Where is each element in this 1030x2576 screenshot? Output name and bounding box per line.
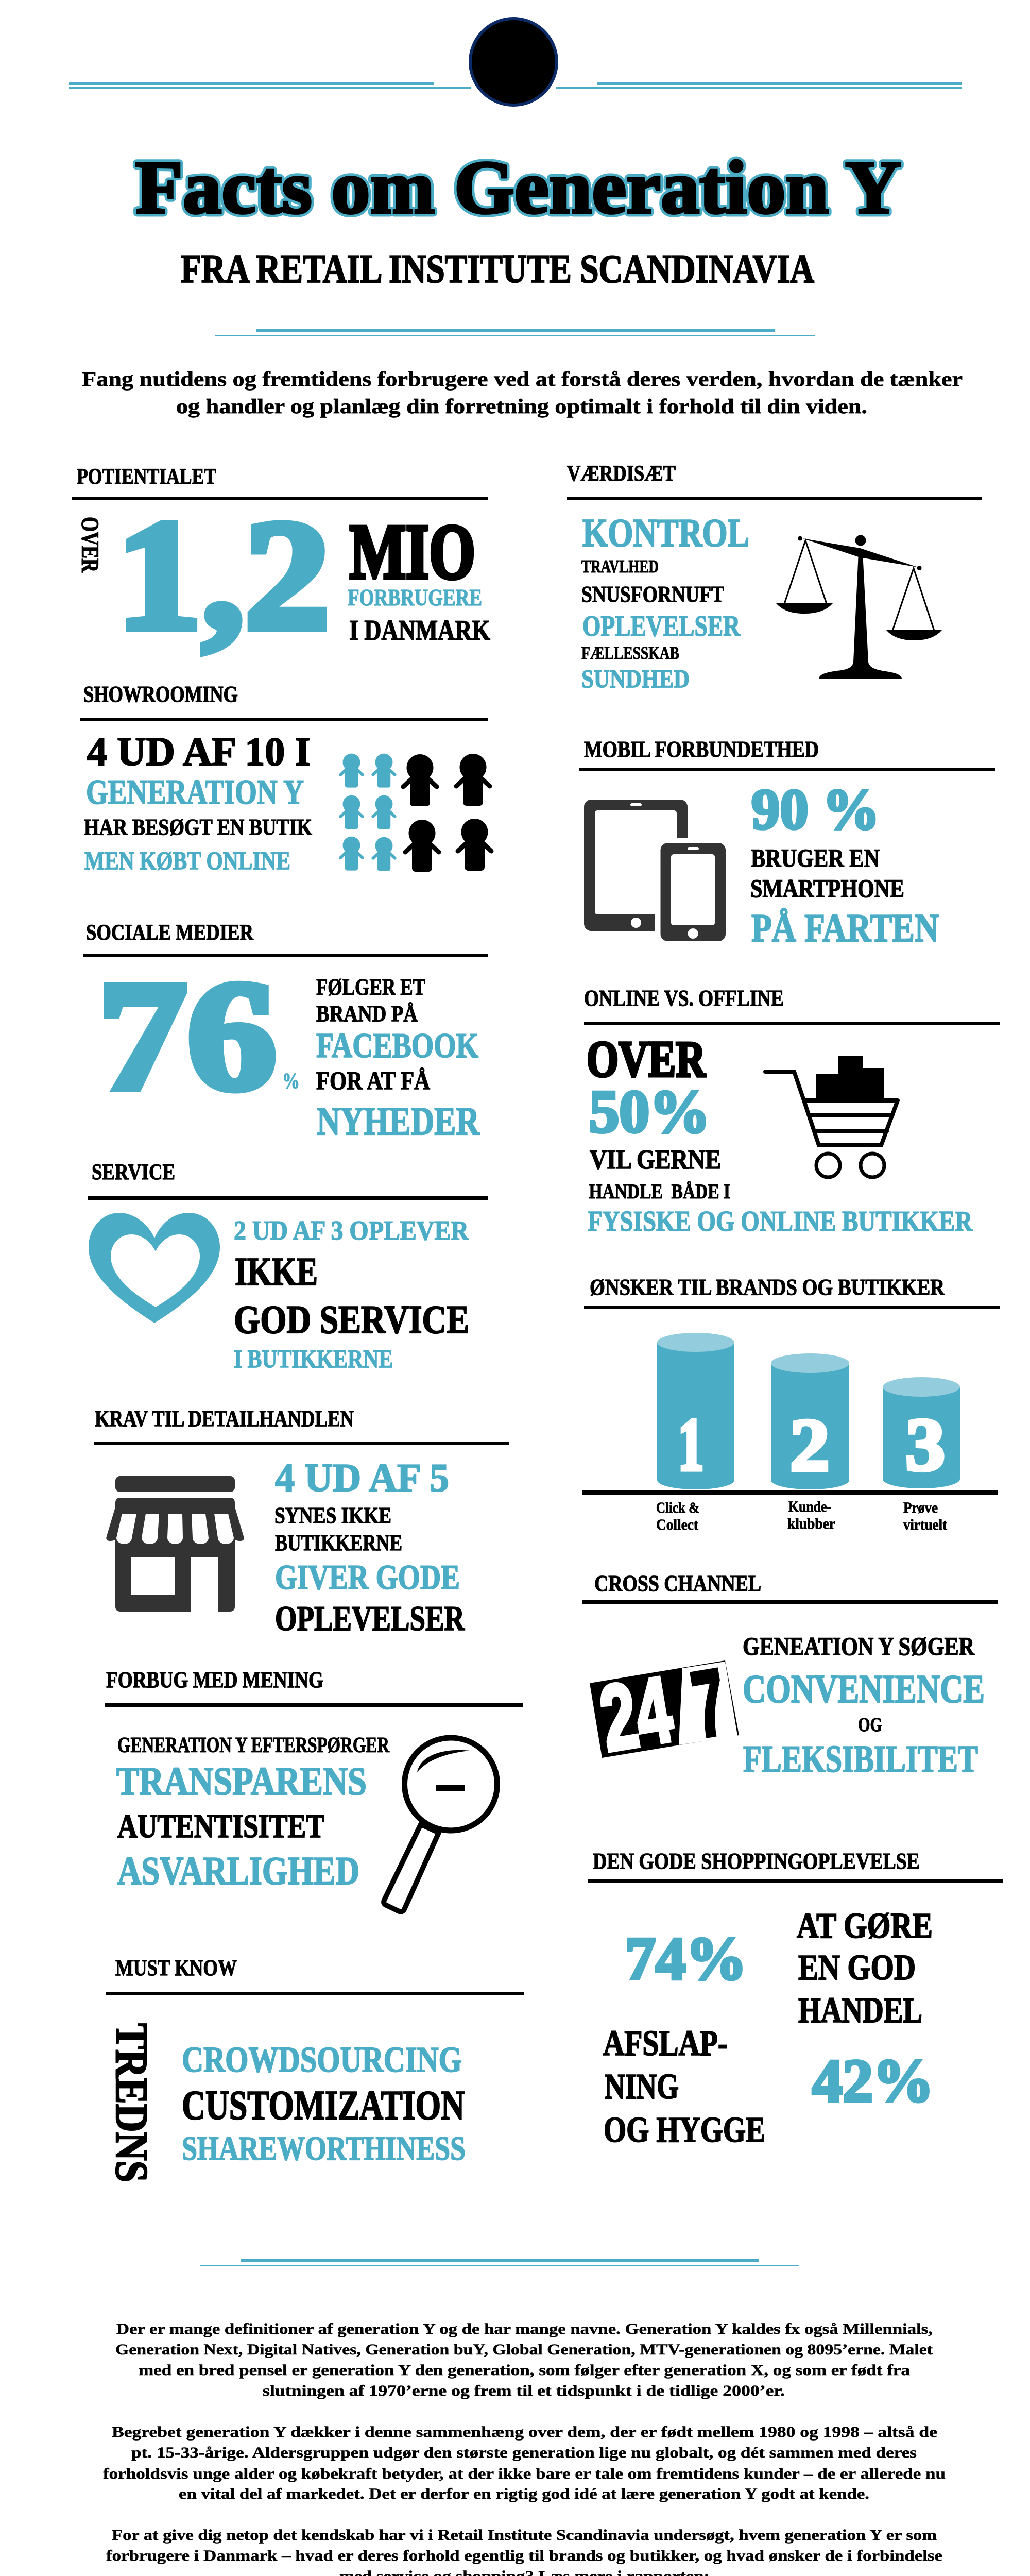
panel: potentialet	[72, 465, 490, 662]
text block: facebook: NYHEDER	[317, 1099, 480, 1143]
text block: 90 percent: PÅ FARTEN	[751, 906, 939, 950]
text block: målgruppe: Begrebet generation Y dækker i denne sammenhæng over dem, der er født mellem 1980 og 1998 – altså de	[112, 2424, 937, 2441]
text block: afslapning og hygge: AFSLAP-	[603, 2024, 728, 2063]
divider: above body text	[200, 2259, 799, 2266]
heading: potentialet: POTIENTIALET	[77, 465, 216, 489]
text block: transparens: TRANSPARENS	[116, 1759, 367, 1803]
big number: 76: 76	[98, 949, 277, 1122]
text block: over 50 percent: VIL GERNE	[590, 1145, 721, 1175]
text block: 4 ud af 5: 4 UD AF 5	[275, 1455, 449, 1500]
chart: ranked cylinders: 2	[790, 1403, 830, 1487]
panel: krav til detailhandlen	[94, 1406, 509, 1638]
text block: målgruppe: en vital del af markedet. Det er derfor en rigtig god idé at lære generation Y godt at kende.	[179, 2485, 869, 2502]
intro text	[82, 367, 963, 418]
text block: 4 ud af 5: OPLEVELSER	[275, 1599, 465, 1638]
icon: store	[106, 1476, 244, 1612]
text block: trends list	[182, 2040, 466, 2167]
text block: 4 ud af 10: MEN KØBT ONLINE	[84, 846, 290, 875]
panel: forbrug med mening	[105, 1667, 523, 1911]
text block: 4 ud af 5: GIVER GODE	[275, 1557, 460, 1597]
text block: over 50 percent	[587, 1030, 972, 1238]
chart: ranked cylinders	[657, 1333, 960, 1489]
text block: convenience: OG	[858, 1714, 882, 1736]
text block: definitions: Generation Next, Digital Natives, Generation buY, Global Generation, MTV-generationen og 8095’erne. Malet	[115, 2341, 933, 2358]
title: Facts om Generation Y	[135, 145, 901, 229]
text block: definitions: Der er mange definitioner af generation Y og de har mange navne. Generation Y kaldes fx også Millennials,	[116, 2320, 933, 2337]
chart labels	[656, 1498, 947, 1533]
header ornament	[69, 19, 962, 105]
text block: values	[581, 511, 749, 693]
text block: at gøre en god handel	[797, 1906, 933, 2030]
text block: god service	[234, 1216, 469, 1373]
icon: magnifying glass	[384, 1738, 497, 1911]
text block: transparens: GENERATION Y EFTERSPØRGER	[117, 1734, 390, 1757]
text block: values: OPLEVELSER	[582, 610, 741, 642]
chart labels: klubber	[787, 1515, 835, 1532]
heading: showrooming: SHOWROOMING	[83, 682, 238, 707]
panel: værdisæt	[567, 462, 982, 693]
text block: at gøre en god handel: EN GOD	[798, 1948, 916, 1988]
text block: mio forbrugere: MIO	[350, 509, 475, 595]
text block: 90 percent: SMARTPHONE	[750, 874, 904, 903]
heading: online vs offline: ONLINE VS. OFFLINE	[584, 986, 784, 1011]
text block: god service: 2 UD AF 3 OPLEVER	[234, 1216, 469, 1246]
text block: 4 ud af 5: SYNES IKKE	[274, 1503, 391, 1528]
chart labels: virtuelt	[903, 1516, 947, 1533]
panel: cross channel	[582, 1571, 998, 1781]
text block: 4 ud af 10: GENERATION Y	[86, 772, 304, 811]
text block: målgruppe: forholdsvis unge alder og købekraft betyder, at der ikke bare er tale om fremtidens kunder – de er allerede nu	[103, 2465, 946, 2482]
text block: at gøre en god handel: AT GØRE	[797, 1906, 933, 1946]
heading: cross channel: CROSS CHANNEL	[594, 1571, 761, 1596]
text block: trends list: CUSTOMIZATION	[182, 2083, 465, 2128]
text block: 90 percent: 90 %	[751, 778, 880, 841]
text block: facebook: FØLGER ET	[316, 974, 425, 1000]
text block: 4 ud af 10: HAR BESØGT EN BUTIK	[84, 815, 312, 840]
text block: values: FÆLLESSKAB	[581, 643, 679, 663]
intro text: Fang nutidens og fremtidens forbrugere ved at forstå deres verden, hvordan de tænker	[82, 367, 963, 391]
panel: online vs offline	[584, 986, 1000, 1238]
text block: transparens: ASVARLIGHED	[117, 1849, 359, 1893]
text block: rapport: forbrugere i Danmark – hvad er deres forhold egentlig til brands og butikker, og hvad ønsker de i forbindelse	[106, 2547, 942, 2564]
panel: mobil forbundethed	[579, 737, 995, 950]
panel: den gode shoppingoplevelse	[588, 1849, 1003, 2150]
text block: 4 ud af 10: 4 UD AF 10 I	[87, 729, 311, 774]
icon: people	[340, 754, 491, 872]
text block: values: KONTROL	[582, 511, 749, 555]
rotated label: trends: TREDNS	[106, 2023, 157, 2182]
text block: transparens	[116, 1734, 390, 1893]
icon: shopping cart	[765, 1056, 898, 1177]
rotated label: over: OVER	[76, 517, 104, 573]
text block: mio forbrugere	[348, 509, 490, 647]
text block: god service: GOD SERVICE	[234, 1297, 469, 1342]
heading: mobil forbundethed: MOBIL FORBUNDETHED	[584, 737, 819, 762]
text block: 4 ud af 5: BUTIKKERNE	[275, 1530, 402, 1555]
text block: mio forbrugere: I DANMARK	[349, 615, 490, 647]
text block: over 50 percent: OVER	[587, 1030, 706, 1088]
text block: afslapning og hygge	[603, 2024, 765, 2150]
text block: facebook: FACEBOOK	[316, 1026, 478, 1065]
text block: facebook: BRAND PÅ	[316, 1001, 418, 1026]
panel: ønsker til brands og butikker	[582, 1275, 1000, 1533]
heading: krav til detailhandlen: KRAV TIL DETAILHANDLEN	[95, 1406, 354, 1431]
heading: den gode shoppingoplevelse: DEN GODE SHOPPINGOPLEVELSE	[593, 1849, 920, 1874]
text block: 4 ud af 10	[84, 729, 312, 875]
text block: transparens: AUTENTISITET	[117, 1808, 324, 1845]
text block: afslapning og hygge: OG HYGGE	[604, 2110, 765, 2150]
text block: convenience	[743, 1632, 985, 1781]
stat: 42 percent: 42%	[812, 2047, 934, 2114]
heading: værdisæt: VÆRDISÆT	[567, 462, 676, 486]
text block: facebook: FOR AT FÅ	[316, 1066, 430, 1095]
text block: 4 ud af 5	[274, 1455, 465, 1638]
panel: service	[88, 1160, 488, 1373]
chart labels: Kunde-	[788, 1498, 831, 1515]
heading: forbug med mening: FORBUG MED MENING	[106, 1667, 323, 1692]
divider: under subtitle	[215, 329, 815, 336]
text block: trends list: SHAREWORTHINESS	[182, 2130, 466, 2167]
chart: ranked cylinders: 3	[905, 1403, 945, 1486]
heading: service: SERVICE	[92, 1160, 175, 1184]
icon: heart	[89, 1213, 220, 1323]
panel: sociale medier	[83, 921, 488, 1143]
text block: målgruppe	[103, 2424, 946, 2502]
icon: 24/7 sign: 24	[593, 1657, 679, 1771]
text block: god service: I BUTIKKERNE	[234, 1344, 393, 1373]
text block: afslapning og hygge: NING	[605, 2067, 679, 2107]
text block: over 50 percent: HANDLE BÅDE I	[589, 1180, 730, 1203]
stat: 74 percent: 74%	[625, 1925, 747, 1992]
text block: trends list: CROWDSOURCING	[182, 2040, 462, 2080]
text block: mio forbrugere: FORBRUGERE	[348, 585, 482, 611]
text block: definitions: med en bred pensel er generation Y den generation, som følger efter generation X, og som er født fra	[139, 2362, 910, 2379]
icon: 24/7 sign: 7	[685, 1650, 733, 1757]
text block: definitions: slutningen af 1970’erne og frem til et tidspunkt i de tidlige 2000’er.	[263, 2382, 785, 2399]
text block: over 50 percent: 50%	[589, 1078, 710, 1145]
panel: showrooming	[80, 682, 491, 875]
text block: målgruppe: pt. 15-33-årige. Aldersgruppen udgør den største generation lige nu globalt, og dét sammen med deres	[131, 2444, 917, 2461]
chart: ranked cylinders: 1	[678, 1403, 704, 1486]
text block: 90 percent	[750, 778, 939, 950]
text block: values: TRAVLHED	[581, 556, 659, 577]
text block: facebook	[316, 974, 480, 1143]
chart labels: Click &	[656, 1499, 699, 1516]
heading: must know: MUST KNOW	[115, 1955, 237, 1980]
title: Facts om Generation Y	[135, 145, 901, 229]
chart labels: Collect	[656, 1516, 698, 1533]
text block: 90 percent: BRUGER EN	[751, 843, 880, 872]
subtitle: FRA RETAIL INSTITUTE SCANDINAVIA	[181, 246, 814, 291]
heading: ønsker: ØNSKER TIL BRANDS OG BUTIKKER	[590, 1275, 945, 1300]
percent sign: %	[282, 1070, 300, 1093]
text block: convenience: GENEATION Y SØGER	[743, 1632, 975, 1660]
text block: at gøre en god handel: HANDEL	[798, 1991, 922, 2030]
text block: values: SUNDHED	[581, 664, 690, 693]
text block: values: SNUSFORNUFT	[581, 582, 724, 607]
text block: god service: IKKE	[235, 1249, 318, 1294]
text block: rapport	[106, 2527, 942, 2576]
intro text: og handler og planlæg din forretning optimalt i forhold til din viden.	[176, 395, 867, 418]
panel: must know	[106, 1955, 524, 2182]
text block: definitions	[115, 2320, 933, 2399]
chart labels: Prøve	[903, 1499, 938, 1516]
heading: sociale medier: SOCIALE MEDIER	[86, 921, 254, 945]
icon: scales	[776, 535, 942, 679]
big number: 1,2: 1,2	[116, 488, 330, 662]
icon: tablet and phone	[584, 800, 726, 941]
text block: rapport: For at give dig netop det kendskab har vi i Retail Institute Scandinavia undersøgt, hvem generation Y er som	[112, 2527, 937, 2544]
